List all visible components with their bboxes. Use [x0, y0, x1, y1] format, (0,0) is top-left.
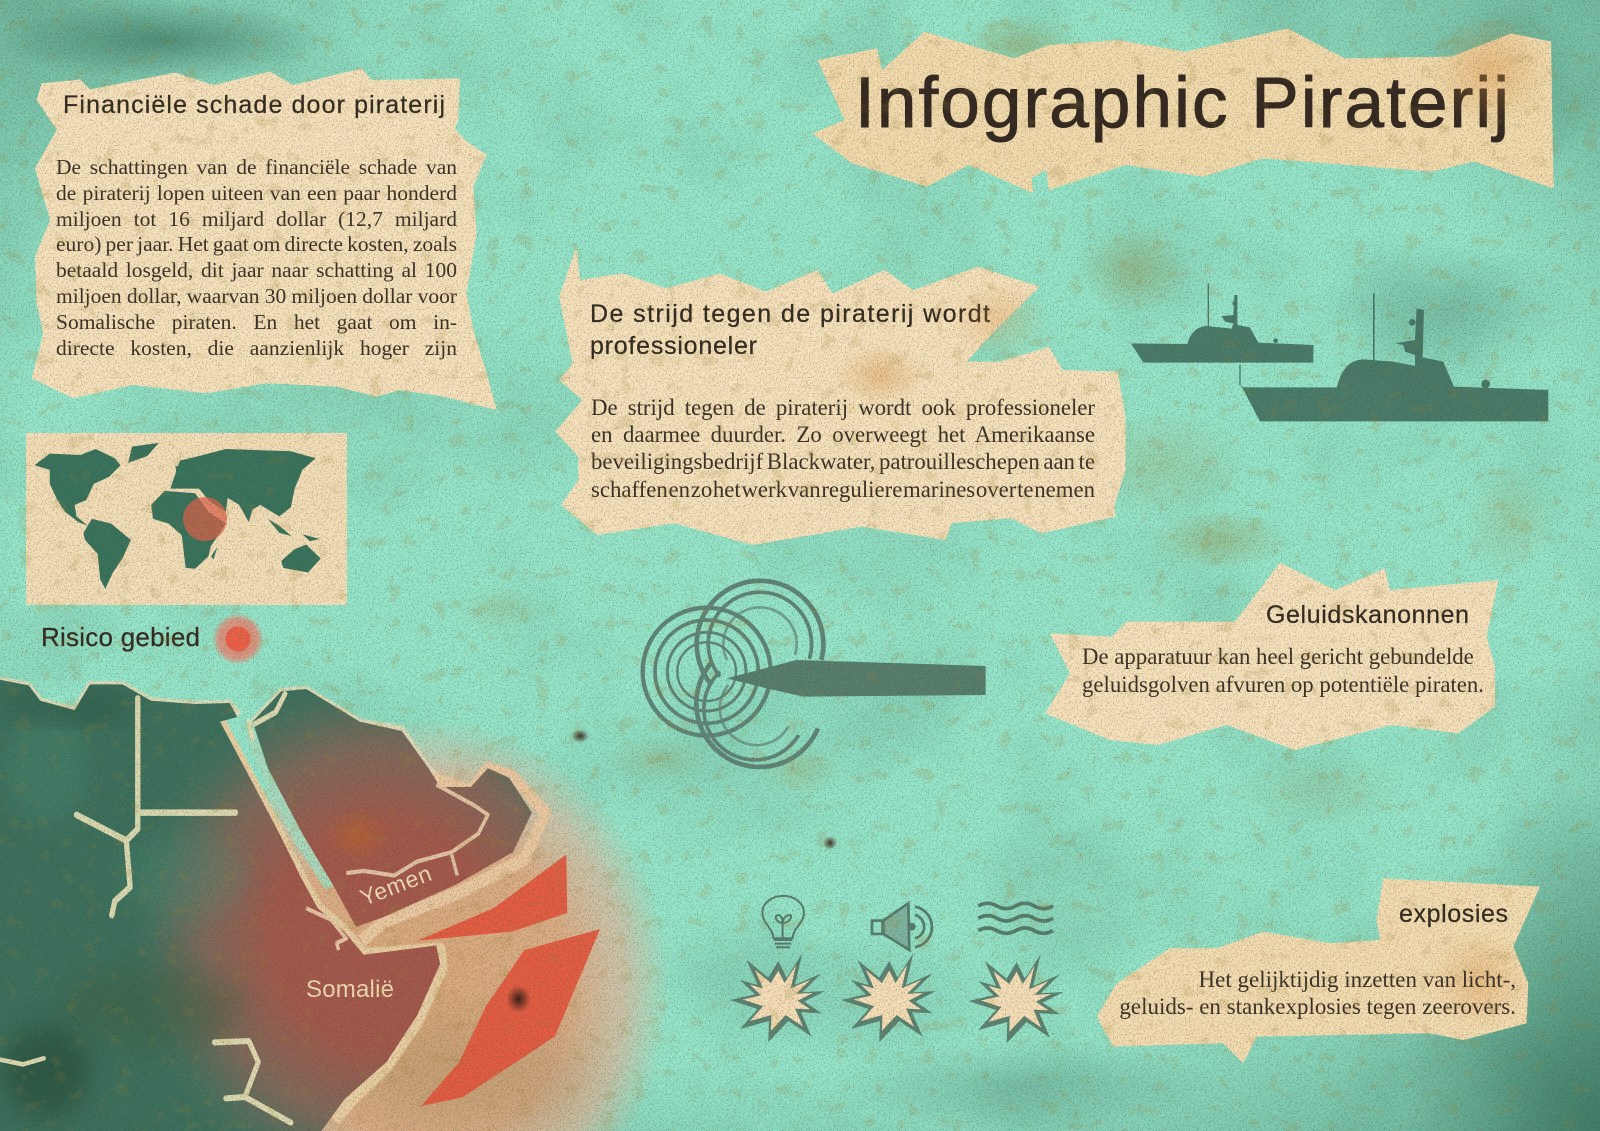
body text: Somalische piraten. En het gaat om in-: [56, 310, 457, 334]
cannon barrel: [727, 660, 986, 697]
panel: professional fight: [555, 247, 1126, 545]
torn paper shape: [1045, 563, 1498, 750]
icon: light bulb: [762, 896, 804, 947]
body text: miljoen tot 16 miljard dollar (12,7 miljard: [56, 207, 457, 231]
legend: risk area: [41, 613, 264, 665]
torn paper shape: [32, 68, 497, 410]
body text: De strijd tegen de piraterij wordt ook professioneler: [591, 395, 1095, 420]
risk zone: Gulf of Aden: [417, 855, 567, 941]
icons: light, sound, smell explosions: [730, 896, 1063, 1043]
panel: explosions: [1097, 878, 1540, 1063]
large ship: [1239, 293, 1548, 421]
body text: en daarmee duurder. Zo overweegt het Amerikaanse: [591, 422, 1095, 447]
panel: sound cannons: [1045, 563, 1512, 750]
body text: De apparatuur kan heel gericht gebundelde: [1082, 644, 1474, 669]
heading: De strijd tegen de piraterij wordt: [590, 300, 990, 328]
torn paper shape: [555, 247, 1126, 545]
body text: miljoen dollar, waarvan 30 miljoen dollar voor: [56, 284, 457, 308]
body text: euro) per jaar. Het gaat om directe kosten, zoals: [56, 232, 457, 256]
world map: [26, 433, 347, 605]
explosion 3: [968, 954, 1063, 1043]
torn paper shape: [812, 28, 1554, 193]
label: Somalië: Somalië: [306, 976, 394, 1003]
icon: sound cannon with waves: [643, 581, 986, 767]
title banner: [812, 28, 1554, 193]
continents: [34, 443, 321, 589]
icon: stench waves: [978, 903, 1053, 933]
explosion 1: [730, 953, 825, 1042]
body text: directe kosten, die aanzienlijk hoger zijn: [56, 336, 457, 360]
body text: [591, 394, 1095, 509]
torn paper shape: [1097, 878, 1540, 1063]
body text: beveiligingsbedrijf Blackwater, patrouilleschepen aan te: [591, 449, 1095, 474]
risk zone: Somali basin: [421, 929, 600, 1106]
sea glow around risk zone: [170, 715, 680, 1131]
body text: [1082, 643, 1512, 703]
panel: financial damage: [32, 68, 497, 410]
heading: professioneler: [590, 332, 757, 360]
heading: explosies: [1399, 900, 1508, 928]
map paper: [26, 433, 347, 605]
legend marker: [212, 613, 264, 665]
title: Infographic Piraterij: [855, 64, 1509, 143]
body text: [56, 155, 457, 370]
label: Yemen: Yemen: [356, 860, 435, 911]
land and coastlines: [0, 680, 600, 1131]
body text: De schattingen van de financiële schade van: [56, 155, 457, 179]
sound waves: [643, 581, 823, 767]
risk area marker: [183, 497, 227, 541]
heading: [590, 300, 990, 360]
body text: schaffen en zo het werk van reguliere marines over te nemen: [591, 477, 1095, 502]
heading: Financiële schade door piraterij: [63, 91, 445, 119]
body text: betaald losgeld, dit jaar naar schatting al 100: [56, 258, 457, 282]
explosion 2: [841, 953, 936, 1042]
small ship: [1128, 283, 1313, 363]
body text: [1100, 966, 1516, 1026]
regional map: Horn of Africa risk zone: [0, 680, 680, 1131]
body text: geluids- en stankexplosies tegen zeerovers.: [1119, 994, 1516, 1019]
corner stain: [1430, 930, 1530, 1030]
icon: loudspeaker: [872, 903, 932, 950]
icon: two navy ships: [1128, 283, 1548, 421]
body text: de piraterij lopen uiteen van een paar honderd: [56, 181, 457, 205]
brown sea tone: [345, 1025, 595, 1125]
body text: geluidsgolven afvuren op potentiële piraten.: [1082, 672, 1484, 697]
heading: Geluidskanonnen: [1266, 601, 1469, 629]
legend text: Risico gebied: [41, 622, 200, 652]
body text: Het gelijktijdig inzetten van licht-,: [1199, 967, 1516, 992]
